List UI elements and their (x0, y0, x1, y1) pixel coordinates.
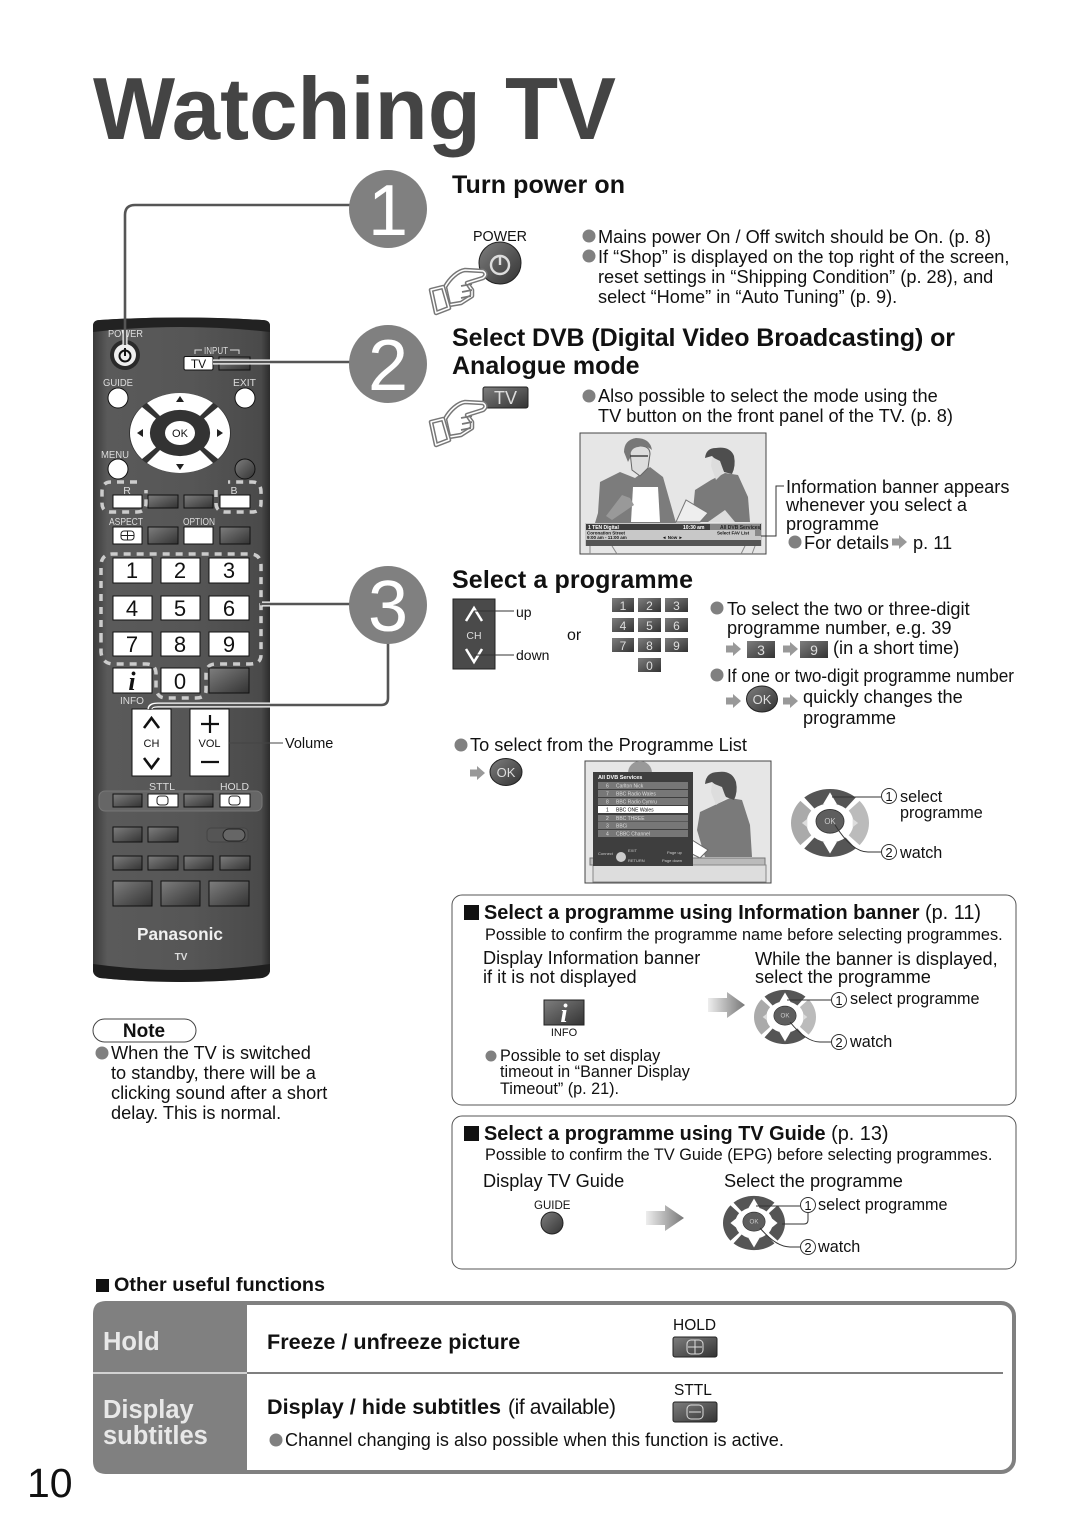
table: other useful functions (93, 1301, 1014, 1474)
information banner overlay: 1 TEN Digital (588, 525, 619, 531)
panel: TV guide (452, 1116, 1016, 1269)
information banner overlay (585, 523, 762, 546)
right instruction: Select the programme (724, 1171, 903, 1191)
note box: to standby, there will be a (111, 1063, 317, 1083)
d-pad diagram: 1 (835, 993, 843, 1008)
icon: channel buttons: CH (466, 630, 482, 642)
volume label: Volume (285, 736, 333, 752)
number keys: 1 (126, 558, 138, 583)
information banner overlay: Coronation Street (587, 530, 626, 536)
text: programme number instructions: If one or two-digit programme number (727, 666, 1014, 686)
colour buttons: R (123, 485, 131, 497)
arrow (646, 1205, 684, 1231)
text: programme number instructions: 9 (810, 642, 818, 658)
row: display subtitles: Channel changing is also possible when this function is active. (285, 1430, 784, 1450)
row: display subtitles: STTL (674, 1382, 712, 1399)
aspect and option buttons: OPTION (183, 516, 215, 528)
d-pad diagram (723, 1196, 948, 1256)
on-screen list: 6 (606, 784, 609, 790)
right instruction: select the programme (755, 967, 931, 987)
colour buttons (102, 482, 261, 512)
number keys: i (128, 667, 136, 696)
lower buttons (113, 827, 250, 906)
on-screen list: All DVB Services (598, 775, 642, 781)
panel: information banner (452, 895, 1016, 1105)
heading: select a programme: Select a programme (452, 566, 693, 594)
heading: turn power on: Turn power on (452, 171, 625, 199)
text: banner callout: For details (804, 533, 889, 553)
text: programme number instructions: (in a short time) (833, 638, 959, 658)
icon: guide button: GUIDE (534, 1200, 571, 1212)
display timeout note (486, 1047, 691, 1098)
text: power notes: select “Home” in “Auto Tuning” (p. 9). (598, 287, 897, 307)
subtitle and hold buttons: HOLD (220, 781, 249, 793)
on-screen list: Page up (667, 850, 683, 855)
number keys: 6 (223, 596, 235, 621)
icon: guide button (534, 1200, 571, 1234)
channel and volume rockers (132, 709, 229, 776)
number keys: INFO (120, 695, 144, 707)
icon: power button with hand: POWER (473, 229, 527, 245)
icon: number keys: 6 (673, 619, 680, 633)
d-pad diagram: select and watch: 1 (885, 789, 893, 804)
text: power notes: If “Shop” is displayed on the top right of the screen, (598, 247, 1009, 267)
row: display subtitles: Display (103, 1396, 195, 1424)
on-screen list: Carlton Nick (616, 784, 644, 790)
d-pad diagram: select and watch: 2 (885, 845, 893, 860)
icon: info button (544, 999, 584, 1039)
text: programme number instructions: To select the two or three-digit (727, 599, 970, 619)
row: hold: Hold (103, 1328, 160, 1356)
on-screen list: BBC Radio Cymru (616, 800, 657, 806)
text: power notes: reset settings in “Shipping Condition” (p. 28), and (598, 267, 993, 287)
heading: select DVB: Analogue mode (452, 352, 640, 380)
left instruction: Display TV Guide (483, 1171, 624, 1191)
power button: POWER (108, 328, 143, 340)
number keys: 3 (223, 558, 235, 583)
menu buttons (101, 449, 255, 479)
on-screen list: 8 (606, 800, 609, 806)
icon: info button: i (560, 999, 568, 1028)
on-screen list: 7 (606, 792, 609, 798)
heading: other useful functions: Other useful functions (114, 1274, 325, 1296)
input buttons (184, 345, 250, 371)
row: display subtitles: (if available) (508, 1396, 616, 1419)
d-pad diagram: watch (817, 1238, 860, 1256)
right instruction (755, 949, 998, 987)
volume label (229, 736, 333, 752)
channel and volume rockers: CH (144, 738, 159, 750)
text: programme number instructions: 3 (757, 642, 765, 658)
icon: number keys: 2 (646, 599, 653, 613)
left instruction: Display Information banner (483, 948, 700, 968)
number keys: 2 (174, 558, 186, 583)
row: display subtitles (103, 1382, 784, 1450)
d-pad diagram: select programme (818, 1196, 948, 1214)
brand logo (137, 924, 223, 963)
information banner overlay: Select FAV List (717, 530, 750, 536)
icon: TV button with hand (431, 387, 528, 445)
icon: number keys: 4 (620, 619, 627, 633)
aspect and option buttons (109, 516, 250, 544)
guide and exit buttons: GUIDE (103, 377, 133, 389)
note box: When the TV is switched (111, 1043, 311, 1063)
number keys: 0 (174, 669, 186, 694)
on-screen list: CBBC Channel (616, 832, 650, 838)
text: banner callout (761, 477, 1009, 553)
left instruction (483, 948, 700, 987)
on-screen list: BBC Radio Wales (616, 792, 656, 798)
icon: channel buttons: down (516, 647, 549, 663)
icon: channel buttons: up (516, 604, 532, 620)
on-screen list: Connect (598, 851, 614, 856)
heading: select DVB (452, 324, 955, 380)
icon: number keys: 3 (673, 599, 680, 613)
icon: number keys: 9 (673, 639, 680, 653)
text: programme number instructions (710, 599, 1014, 728)
text: banner callout: Information banner appears (786, 477, 1009, 497)
text: mode note (582, 386, 953, 426)
d-pad diagram: OK (781, 1012, 790, 1020)
input buttons: TV (191, 357, 206, 371)
d-pad diagram: select and watch: programme (900, 804, 983, 822)
panel description: Possible to confirm the programme name before selecting programmes. (485, 926, 1003, 944)
right instruction: While the banner is displayed, (755, 949, 998, 969)
row: display subtitles: subtitles (103, 1422, 208, 1450)
text: mode note: Also possible to select the mode using the (598, 386, 938, 406)
icon: TV button with hand: TV (494, 388, 517, 408)
text: power notes: Mains power On / Off switch should be On. (p. 8) (598, 227, 991, 247)
text: programme list: OK (497, 765, 516, 780)
brand logo: Panasonic (137, 924, 223, 944)
left instruction: if it is not displayed (483, 967, 637, 987)
subtitle and hold buttons: STTL (149, 781, 175, 793)
on-screen list: 1 (606, 808, 609, 814)
row: hold (103, 1317, 717, 1357)
on-screen list: EXIT (628, 848, 637, 853)
icon: number keys (612, 598, 688, 673)
icon: power button with hand (431, 229, 527, 313)
icon: number keys: 8 (646, 639, 653, 653)
guide and exit buttons: EXIT (233, 377, 257, 389)
text: programme number instructions: programme (803, 708, 896, 728)
on-screen list: 3 (606, 824, 609, 830)
information banner overlay: ◄ Now ► (662, 535, 683, 540)
icon: info button: INFO (551, 1027, 578, 1039)
title: Watching TV (93, 59, 616, 158)
colour buttons: B (230, 485, 238, 497)
step number 1 (349, 170, 427, 251)
row: display subtitles: Display / hide subtitles (267, 1394, 501, 1419)
number keys: 8 (174, 632, 186, 657)
panel description: Possible to confirm the TV Guide (EPG) before selecting programmes. (485, 1146, 992, 1164)
heading: select DVB: Select DVB (Digital Video Broadcasting) or (452, 324, 955, 352)
number keys: 4 (126, 596, 138, 621)
input buttons: INPUT (204, 345, 228, 357)
step number 2 (349, 325, 427, 406)
channel and volume rockers: VOL (198, 738, 221, 750)
on-screen list: BBC THREE (616, 816, 645, 822)
on-screen list: Page down (662, 858, 682, 863)
d-pad diagram: select and watch: select (900, 788, 943, 806)
step number 3 (349, 566, 427, 647)
icon: number keys: 7 (620, 639, 627, 653)
icon: number keys: 0 (646, 659, 653, 673)
step number 1: 1 (368, 171, 408, 251)
on-screen list: BBC ONE Wales (616, 808, 654, 814)
text: programme number instructions: quickly changes the (803, 687, 963, 707)
step number 3: 3 (368, 567, 408, 647)
on-screen list (593, 772, 693, 866)
on-screen list: BBCi (616, 824, 627, 830)
on-screen list: RETURN (628, 858, 645, 863)
text: programme number instructions: programme number, e.g. 39 (727, 618, 951, 638)
text: programme list (454, 735, 747, 786)
step 1 connector arrow (125, 205, 355, 345)
note box: Note (123, 1021, 165, 1042)
step number 2: 2 (368, 326, 408, 406)
number keys: 5 (174, 596, 186, 621)
d-pad diagram: watch (849, 1033, 892, 1051)
step 2 connector arrow (213, 360, 355, 364)
on-screen list: 2 (606, 816, 609, 822)
note box: clicking sound after a short (111, 1083, 327, 1103)
icon: number keys: 5 (646, 619, 653, 633)
subtitle and hold buttons (99, 781, 262, 811)
remote control (93, 318, 333, 982)
brand logo: TV (175, 952, 188, 963)
display timeout note: Timeout” (p. 21). (500, 1080, 619, 1098)
text: programme number instructions: OK (753, 692, 772, 707)
d-pad diagram: 1 (804, 1198, 812, 1213)
step 3 connector arrow (150, 604, 388, 710)
row: hold: HOLD (673, 1317, 716, 1334)
d-pad diagram: select programme (850, 990, 980, 1008)
on-screen list: 4 (606, 832, 609, 838)
number keys (101, 554, 261, 707)
power button (108, 328, 143, 370)
text: banner callout: whenever you select a (785, 495, 968, 515)
d-pad diagram: 2 (804, 1240, 812, 1255)
d-pad diagram (754, 990, 980, 1051)
aspect and option buttons: ASPECT (109, 516, 143, 528)
d-pad diagram: select and watch: watch (899, 844, 942, 862)
note box: delay. This is normal. (111, 1103, 281, 1123)
d-pad diagram: 2 (835, 1035, 843, 1050)
text: banner callout: p. 11 (913, 533, 952, 553)
display timeout note: Possible to set display (500, 1047, 661, 1065)
text: or: or (567, 627, 582, 644)
note box (93, 1019, 327, 1123)
guide and exit buttons (103, 377, 257, 408)
panel heading: Select a programme using Information banner (p. 11) (484, 902, 981, 924)
text: banner callout: programme (786, 514, 879, 534)
d-pad diagram: select and watch: OK (824, 817, 836, 826)
programme list screen (585, 761, 771, 883)
page number: 10 (27, 1460, 73, 1506)
icon: channel buttons (453, 599, 549, 669)
text: mode note: TV button on the front panel of the TV. (p. 8) (598, 406, 953, 426)
arrow (708, 992, 745, 1018)
text: programme list: To select from the Programme List (470, 735, 747, 755)
d-pad diagram: OK (750, 1218, 759, 1226)
d-pad (129, 393, 231, 473)
TV screen with information banner (580, 433, 766, 554)
number keys: 7 (126, 632, 138, 657)
display timeout note: timeout in “Banner Display (500, 1063, 691, 1081)
text: power notes (582, 227, 1009, 307)
d-pad: OK (172, 428, 189, 440)
d-pad diagram: select and watch (791, 788, 983, 862)
panel heading: Select a programme using TV Guide (p. 13) (484, 1123, 889, 1145)
row: hold: Freeze / unfreeze picture (267, 1329, 520, 1354)
menu buttons: MENU (101, 449, 129, 461)
information banner overlay: All DVB Services (720, 525, 761, 531)
information banner overlay: 9:00 am - 11:00 am (587, 535, 627, 540)
number keys: 9 (223, 632, 235, 657)
icon: number keys: 1 (620, 599, 627, 613)
information banner overlay: 10:30 am (683, 525, 705, 531)
